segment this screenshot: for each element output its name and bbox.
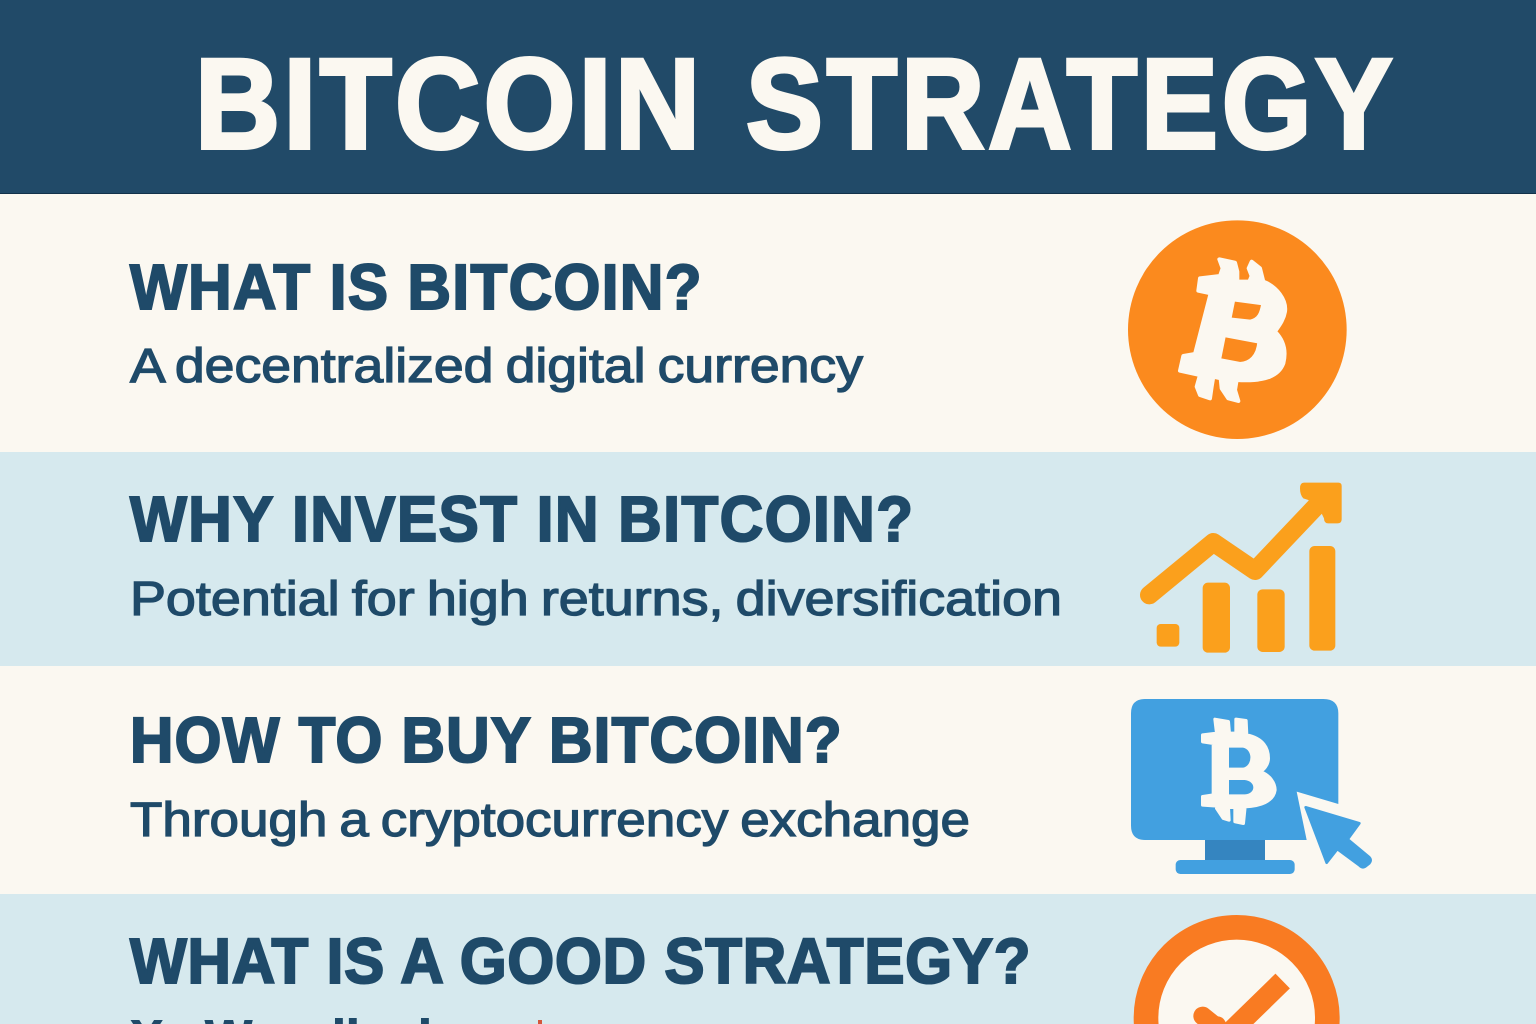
title banner bbox=[0, 0, 1536, 194]
text: exchange: Through a cryptocurrency exchange bbox=[130, 794, 970, 847]
panel: how to buy bbox=[130, 699, 1371, 874]
text: reasons: Potential for high returns, diversification bbox=[130, 573, 1062, 626]
title: BITCOIN bbox=[195, 34, 700, 176]
title: STRATEGY bbox=[746, 32, 1392, 175]
icon: growth chart bbox=[1149, 483, 1342, 653]
icon: red tick mark bbox=[538, 1020, 542, 1024]
panel: what is bitcoin bbox=[130, 220, 1347, 439]
icon: check mark in circle bbox=[1146, 927, 1327, 1024]
text: definition: A decentralized digital currency bbox=[130, 340, 863, 393]
heading: why invest: WHY INVEST IN BITCOIN? bbox=[130, 484, 913, 555]
panel: why invest bbox=[130, 483, 1342, 653]
heading: good strategy: WHAT IS A GOOD STRATEGY? bbox=[130, 926, 1031, 997]
panel: good strategy bbox=[130, 926, 1327, 1024]
icon: computer with bitcoin and cursor bbox=[1131, 699, 1371, 874]
icon: bitcoin coin bbox=[1128, 220, 1347, 439]
title bbox=[195, 32, 1392, 176]
heading: how to buy: HOW TO BUY BITCOIN? bbox=[130, 705, 842, 776]
heading: what is bitcoin: WHAT IS BITCOIN? bbox=[130, 252, 702, 323]
